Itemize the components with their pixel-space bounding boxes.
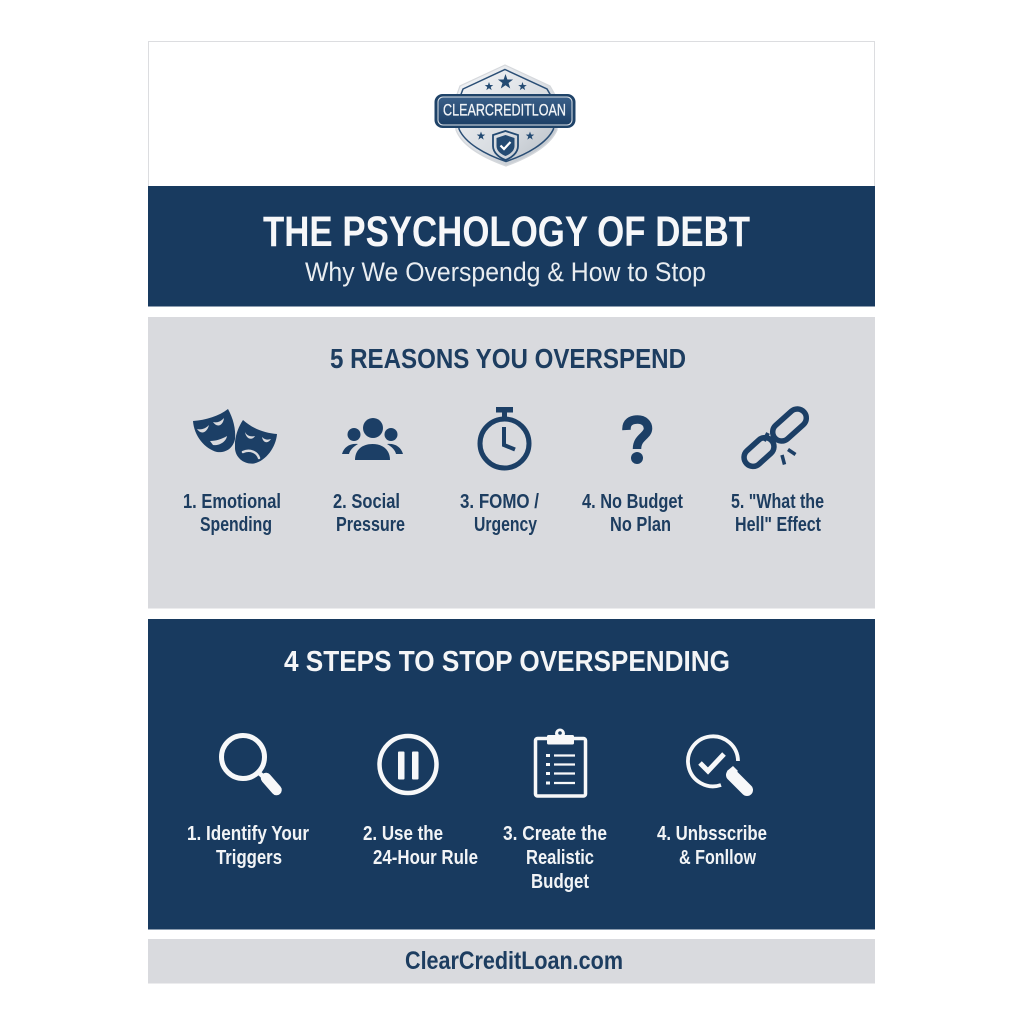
logo wordmark: CLEARCREDITLOAN — [443, 100, 566, 120]
label: what the hell effect: Hell" Effect — [735, 513, 821, 536]
label: emotional spending: Spending — [200, 513, 272, 536]
label: identify your triggers: 1. Identify Your — [187, 822, 309, 845]
heading: reasons: 5 REASONS YOU OVERSPEND — [330, 343, 686, 374]
icon: clipboard checklist — [536, 728, 586, 796]
icon: broken chain link — [740, 405, 810, 470]
title banner — [148, 186, 875, 306]
logo: ClearCreditLoan shield — [434, 65, 576, 166]
label: fomo urgency — [460, 490, 539, 536]
footer URL: ClearCreditLoan.com — [405, 947, 623, 975]
label: identify your triggers — [187, 822, 309, 869]
label: fomo urgency: Urgency — [474, 513, 537, 536]
label: fomo urgency: 3. FOMO / — [460, 490, 539, 513]
footer bar — [148, 939, 875, 984]
icon: question mark — [626, 420, 648, 464]
panel: 4 steps to stop overspending — [148, 619, 875, 930]
label: social pressure — [333, 490, 405, 536]
label: unsubscribe and follow — [657, 822, 767, 869]
icon: theatre masks — [193, 409, 277, 464]
label: no budget no plan: No Plan — [610, 513, 671, 536]
icon: magnifying glass — [222, 736, 276, 790]
title: THE PSYCHOLOGY OF DEBT — [263, 208, 750, 256]
label: 24-hour rule: 24-Hour Rule — [373, 846, 478, 869]
label: identify your triggers: Triggers — [216, 846, 282, 869]
label: 24-hour rule: 2. Use the — [363, 822, 443, 845]
icon: stopwatch — [480, 407, 529, 468]
label: social pressure: Pressure — [336, 513, 405, 536]
label: no budget no plan — [582, 490, 683, 536]
label: what the hell effect: 5. "What the — [731, 490, 824, 513]
heading: steps: 4 STEPS TO STOP OVERSPENDING — [284, 646, 730, 678]
label: emotional spending — [183, 490, 281, 536]
label: no budget no plan: 4. No Budget — [582, 490, 683, 513]
subtitle: Why We Overspendg & How to Stop — [305, 257, 706, 287]
icon: check with unsubscribe tag — [688, 736, 747, 790]
label: realistic budget: Realistic — [526, 846, 594, 869]
label: realistic budget: 3. Create the — [503, 822, 607, 845]
label: 24-hour rule — [363, 822, 478, 869]
label: unsubscribe and follow: 4. Unbsscribe — [657, 822, 767, 845]
label: realistic budget — [503, 822, 607, 893]
label: realistic budget: Budget — [531, 870, 589, 893]
label: social pressure: 2. Social — [333, 490, 400, 513]
label: what the hell effect — [731, 490, 824, 536]
icon: pause button — [380, 736, 436, 793]
header panel with logo — [148, 42, 874, 192]
label: emotional spending: 1. Emotional — [183, 490, 281, 513]
icon: group of people — [342, 418, 403, 460]
label: unsubscribe and follow: & Fonllow — [679, 846, 756, 869]
panel: 5 reasons you overspend — [148, 317, 875, 608]
